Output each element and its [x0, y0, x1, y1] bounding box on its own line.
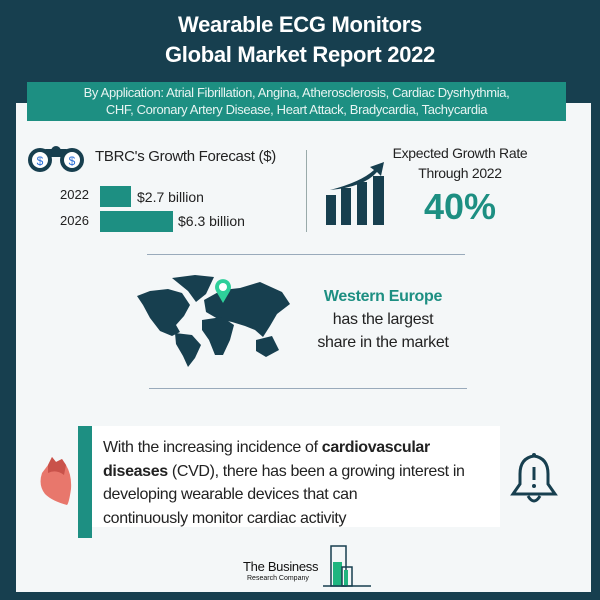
subtitle band: By Application: Atrial Fibrillation, Angina, Atherosclerosis, Cardiac Dysrhythmia,	[84, 85, 509, 100]
growth rate text: Expected Growth Rate	[393, 145, 527, 161]
stat: 40%: 40%	[424, 186, 496, 227]
region text	[317, 288, 449, 351]
region text: Western Europe	[324, 288, 442, 305]
logo: The Business	[243, 559, 318, 574]
icon: bell	[510, 453, 558, 502]
forecast heading: TBRC's Growth Forecast ($)	[95, 148, 276, 165]
icon: heart	[40, 457, 72, 505]
icon: binoculars: $	[69, 154, 76, 168]
subtitle band: CHF, Coronary Artery Disease, Heart Attack, Bradycardia, Tachycardia	[106, 102, 487, 117]
icon: binoculars	[28, 146, 84, 172]
subtitle band	[27, 82, 566, 121]
icon: world map	[137, 275, 290, 367]
bar chart: 2022	[60, 187, 89, 202]
bar chart: 2026	[60, 213, 89, 228]
growth rate text: Through 2022	[418, 165, 502, 181]
title: Global Market Report 2022	[165, 42, 435, 67]
callout: continuously monitor cardiac activity	[103, 510, 346, 526]
main panel	[16, 103, 591, 592]
region text: share in the market	[317, 334, 449, 351]
title	[165, 12, 435, 67]
title: Wearable ECG Monitors	[178, 12, 422, 37]
growth rate text	[393, 145, 528, 181]
bar chart	[60, 186, 245, 232]
icon: growth chart	[326, 162, 384, 225]
callout	[78, 426, 500, 538]
region text: has the largest	[333, 311, 433, 328]
callout: With the increasing incidence of cardiovascular diseases (CVD), there has been a growing interest in developing wearable devices that can	[103, 439, 465, 503]
logo	[243, 545, 371, 587]
bar chart: $2.7 billion	[137, 189, 204, 205]
logo: Research Company	[247, 575, 309, 582]
bar chart: $6.3 billion	[178, 213, 245, 229]
icon: binoculars: $	[37, 154, 44, 168]
